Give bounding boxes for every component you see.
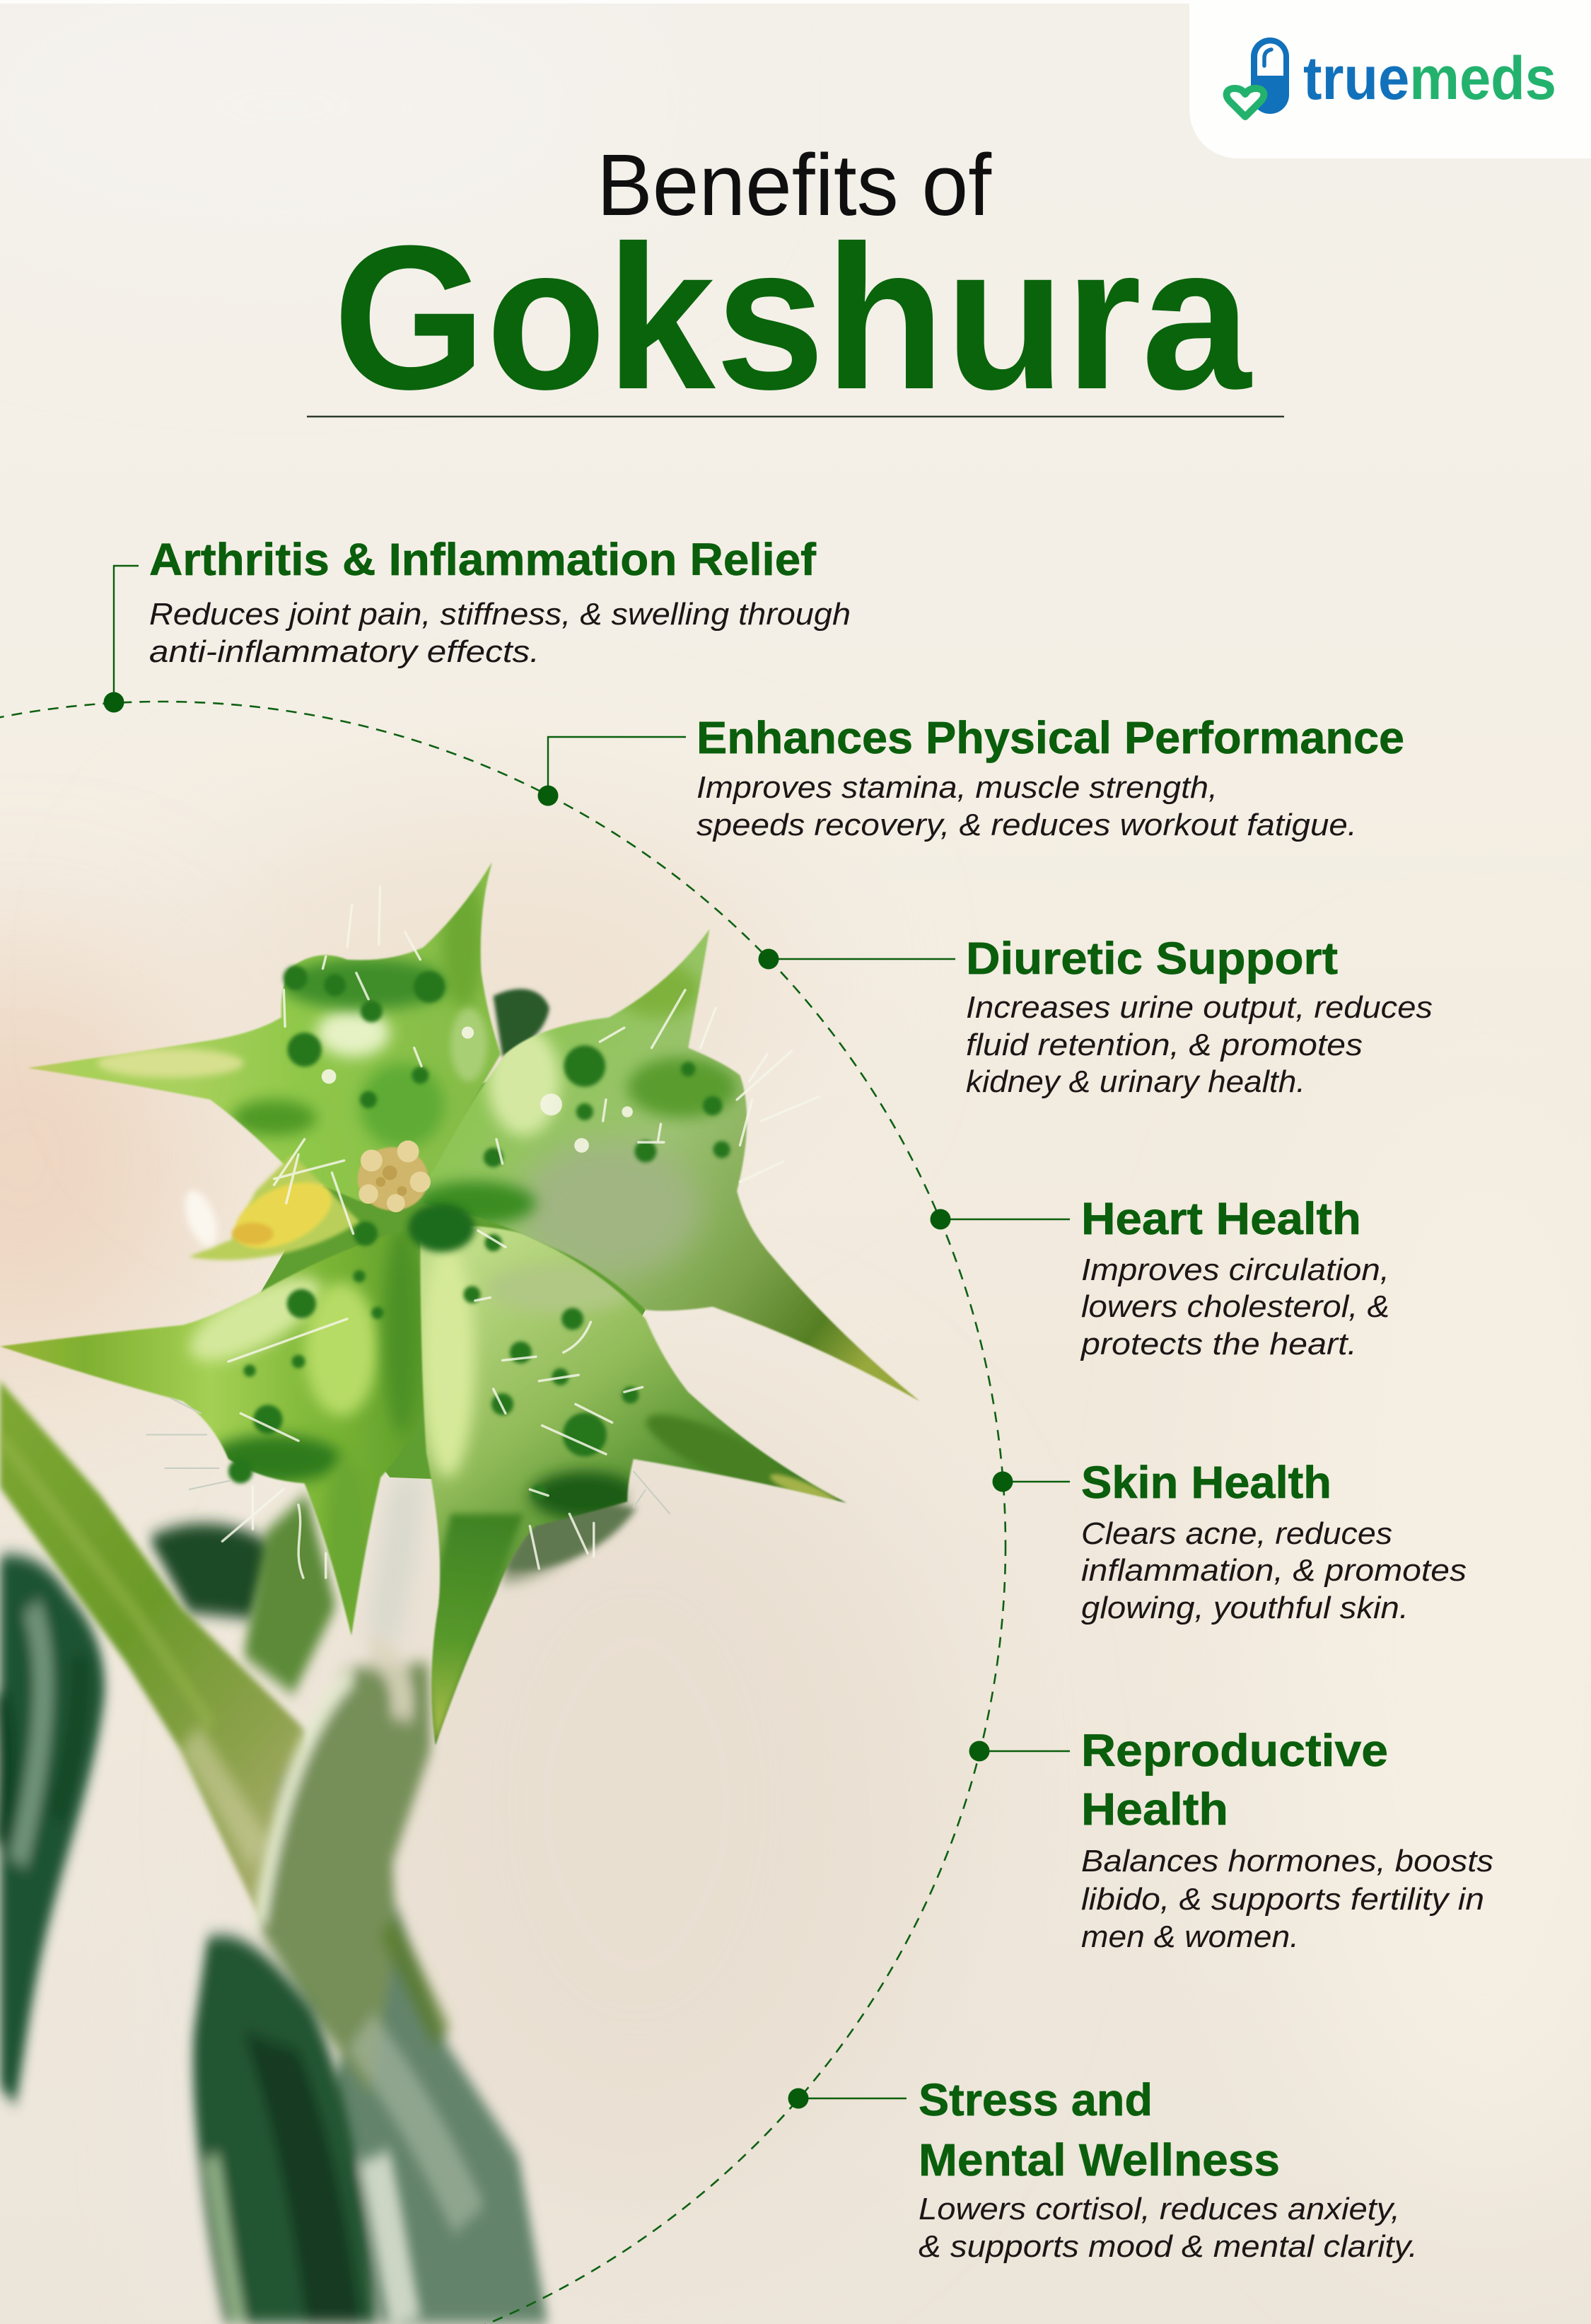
big diagonal stem (0, 1381, 307, 1938)
dark center of fruit (408, 1203, 475, 1252)
benefit: reproductive health: Health (1081, 1784, 1228, 1835)
shaded leaf behind right of fruit (501, 1487, 631, 1581)
shadow leaf behind bottom (506, 1496, 636, 1569)
benefit: arthritis & inflammation relief (103, 534, 851, 713)
gokshura fruit photo (0, 862, 920, 1745)
benefit: reproductive health: men & women. (1081, 1919, 1299, 1954)
benefit: heart health: Improves circulation, (1081, 1253, 1389, 1287)
pale stem behind fruit (366, 1469, 429, 1650)
benefit: heart health (931, 1193, 1389, 1361)
logo wordmark: truemeds (1303, 45, 1556, 112)
dashed benefits arc (0, 702, 1006, 2324)
connector and dot (788, 2088, 907, 2109)
icon: capsule and heart (1227, 37, 1289, 117)
benefit: stress and mental wellness: Stress and (919, 2074, 1153, 2125)
benefit: heart health: Heart Health (1081, 1193, 1361, 1244)
benefit: reproductive health: Reproductive (1081, 1725, 1388, 1776)
title: Gokshura (333, 203, 1252, 432)
logo panel (1189, 0, 1591, 158)
benefit: diuretic support: Diuretic Support (966, 933, 1338, 984)
benefit: enhances physical performance: Enhances Physical Performance (697, 712, 1404, 763)
bottom dark leaf (193, 1936, 406, 2324)
benefit: stress and mental wellness: Lowers cortisol, reduces anxiety, (919, 2192, 1400, 2226)
benefit: stress and mental wellness: & supports mood & mental clarity. (919, 2229, 1418, 2264)
yellow flower remnant (178, 1141, 431, 1262)
benefit: heart health: lowers cholesterol, & (1081, 1289, 1389, 1324)
back dark leaf (148, 1523, 275, 1619)
benefit: reproductive health (969, 1725, 1493, 1954)
plant stems and leaves photo (0, 1381, 631, 2324)
segment: bottom right (420, 1226, 846, 1745)
benefit: enhances physical performance: Improves stamina, muscle strength, (697, 770, 1218, 805)
benefit: diuretic support: Increases urine output, reduces (966, 990, 1433, 1025)
back green stem (243, 1494, 336, 1694)
dark leaf behind top (494, 989, 549, 1057)
white hairs and specular highlights (222, 886, 819, 1578)
benefit: skin health (993, 1457, 1467, 1625)
benefit: diuretic support: kidney & urinary health. (966, 1064, 1305, 1099)
benefit: arthritis & inflammation relief: Reduces joint pain, stiffness, & swelling through (149, 597, 851, 632)
benefit: stress and mental wellness: Mental Wellness (919, 2134, 1280, 2185)
connector and dot (758, 949, 955, 969)
benefit: skin health: Clears acne, reduces (1081, 1516, 1392, 1551)
benefit: stress and mental wellness (788, 2074, 1418, 2264)
benefit: skin health: Skin Health (1081, 1457, 1331, 1508)
title: Benefits of (597, 137, 992, 234)
benefit: reproductive health: libido, & supports fertility in (1081, 1882, 1484, 1917)
benefit: enhances physical performance: speeds recovery, & reduces workout fatigue. (697, 808, 1357, 842)
fuzzy second stem (257, 1650, 548, 2324)
segment: bottom left (0, 1228, 424, 1636)
benefit: skin health: inflammation, & promotes (1081, 1553, 1467, 1588)
warts (228, 965, 730, 1500)
fruit body base (256, 1075, 646, 1483)
connector and dot (969, 1741, 1070, 1761)
connector and dot (931, 1209, 1070, 1229)
connector and dot (103, 566, 139, 713)
left dark leaf (0, 1555, 105, 2103)
connector and dot (993, 1471, 1070, 1492)
benefit: diuretic support: fluid retention, & promotes (966, 1028, 1363, 1062)
benefit: skin health: glowing, youthful skin. (1081, 1591, 1409, 1625)
benefit: enhances physical performance (537, 712, 1404, 842)
benefit: arthritis & inflammation relief: anti-inflammatory effects. (149, 634, 540, 669)
segment: right (414, 929, 920, 1401)
connector and dot (537, 737, 686, 806)
benefit: reproductive health: Balances hormones, boosts (1081, 1844, 1493, 1878)
benefit: arthritis & inflammation relief: Arthritis & Inflammation Relief (149, 534, 817, 585)
segment: top (28, 862, 501, 1203)
fuzzy hairs halo (122, 1869, 230, 2319)
benefit: diuretic support (758, 933, 1433, 1099)
benefit: heart health: protects the heart. (1080, 1327, 1357, 1361)
